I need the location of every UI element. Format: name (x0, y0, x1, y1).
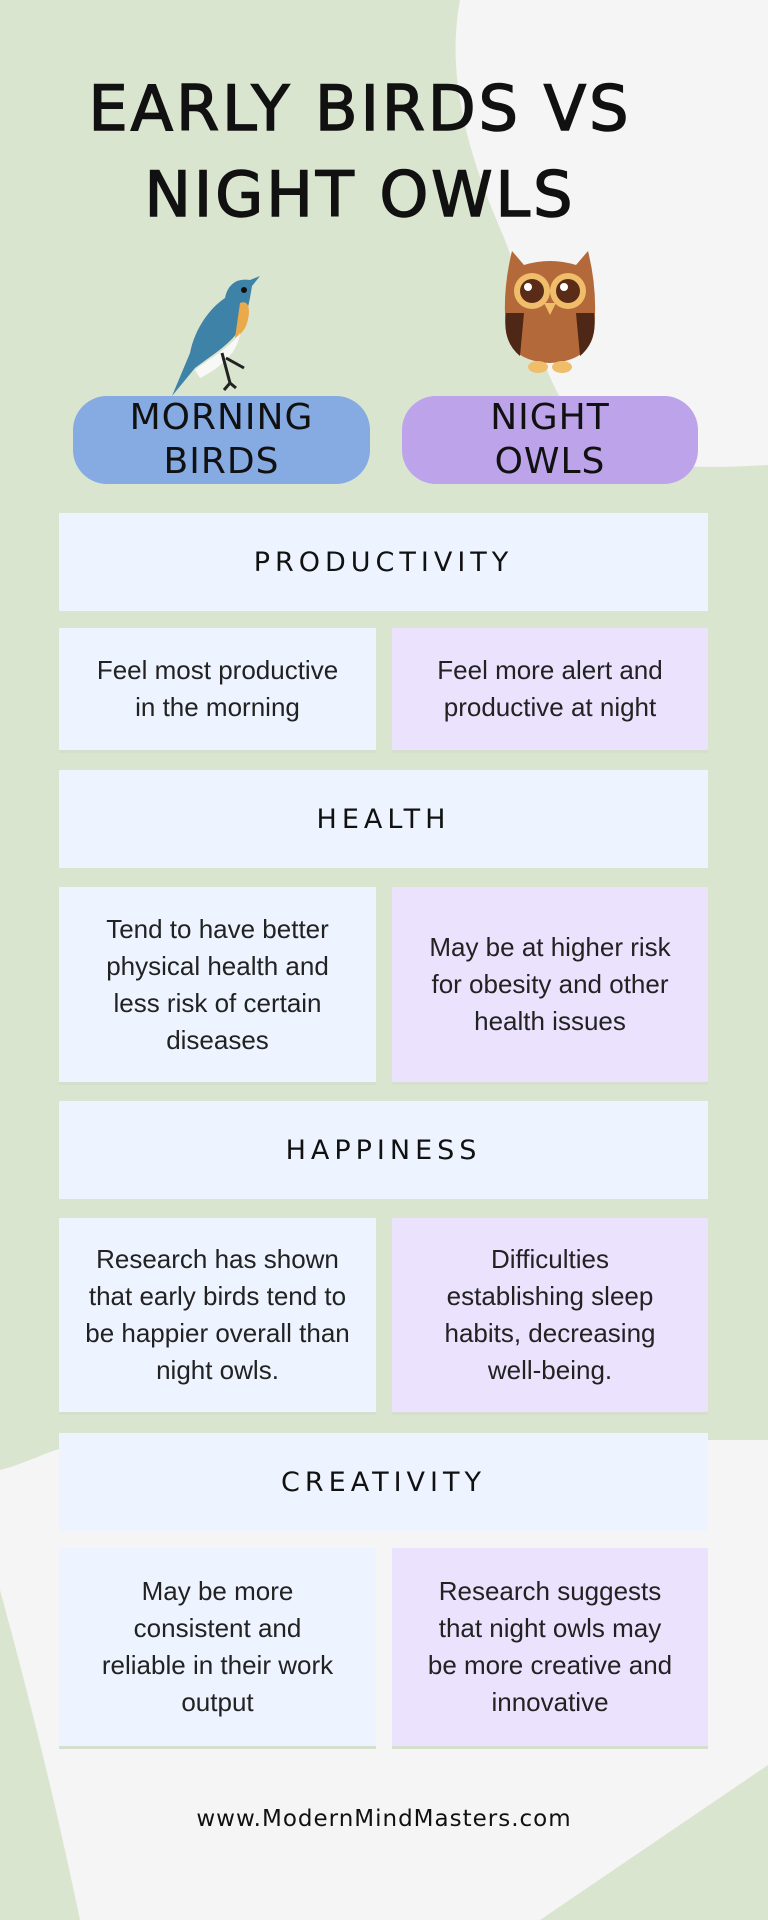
pill: morning birds: BIRDS (164, 441, 279, 482)
heading: health (59, 770, 708, 868)
footer: www.ModernMindMasters.com (196, 1806, 572, 1832)
text block: health morning (59, 887, 376, 1082)
text block: productivity morning: Feel most productive in the morning (97, 655, 338, 722)
text block: productivity night (392, 628, 708, 750)
text block: happiness night (392, 1218, 708, 1412)
title: EARLY BIRDS VS (88, 72, 632, 145)
heading: happiness: HAPPINESS (286, 1134, 481, 1166)
text block: health night: May be at higher risk for obesity and other health issues (429, 932, 671, 1036)
text block: creativity night (392, 1548, 708, 1746)
text block: happiness morning (59, 1218, 376, 1412)
heading: productivity: PRODUCTIVITY (254, 546, 513, 578)
text block: creativity morning (59, 1548, 376, 1746)
icon: owl (504, 251, 596, 373)
pill: morning birds (73, 396, 370, 484)
text block: productivity night: Feel more alert and productive at night (437, 655, 663, 722)
heading: health: HEALTH (317, 804, 450, 834)
heading: creativity (59, 1433, 708, 1531)
text block: productivity morning (59, 628, 376, 750)
heading: creativity: CREATIVITY (281, 1466, 486, 1498)
pill: night owls: OWLS (495, 441, 605, 482)
text block: health morning: Tend to have better physical health and less risk of certain diseases (106, 914, 329, 1054)
text block: creativity morning: May be more consistent and reliable in their work output (102, 1576, 333, 1717)
heading: happiness (59, 1101, 708, 1199)
pill: night owls: NIGHT (490, 397, 610, 438)
pill: morning birds: MORNING (130, 397, 313, 438)
heading: productivity (59, 513, 708, 611)
text block: health night (392, 887, 708, 1082)
title: NIGHT OWLS (145, 158, 575, 231)
text block: happiness night: Difficulties establishing sleep habits, decreasing well-being. (444, 1244, 656, 1385)
text block: happiness morning: Research has shown that early birds tend to be happier overall than night owls. (85, 1244, 350, 1385)
text block: creativity night: Research suggests that night owls may be more creative and innovative (428, 1576, 672, 1717)
title (88, 72, 632, 231)
pill: night owls (402, 396, 698, 484)
icon: bird (172, 276, 260, 396)
